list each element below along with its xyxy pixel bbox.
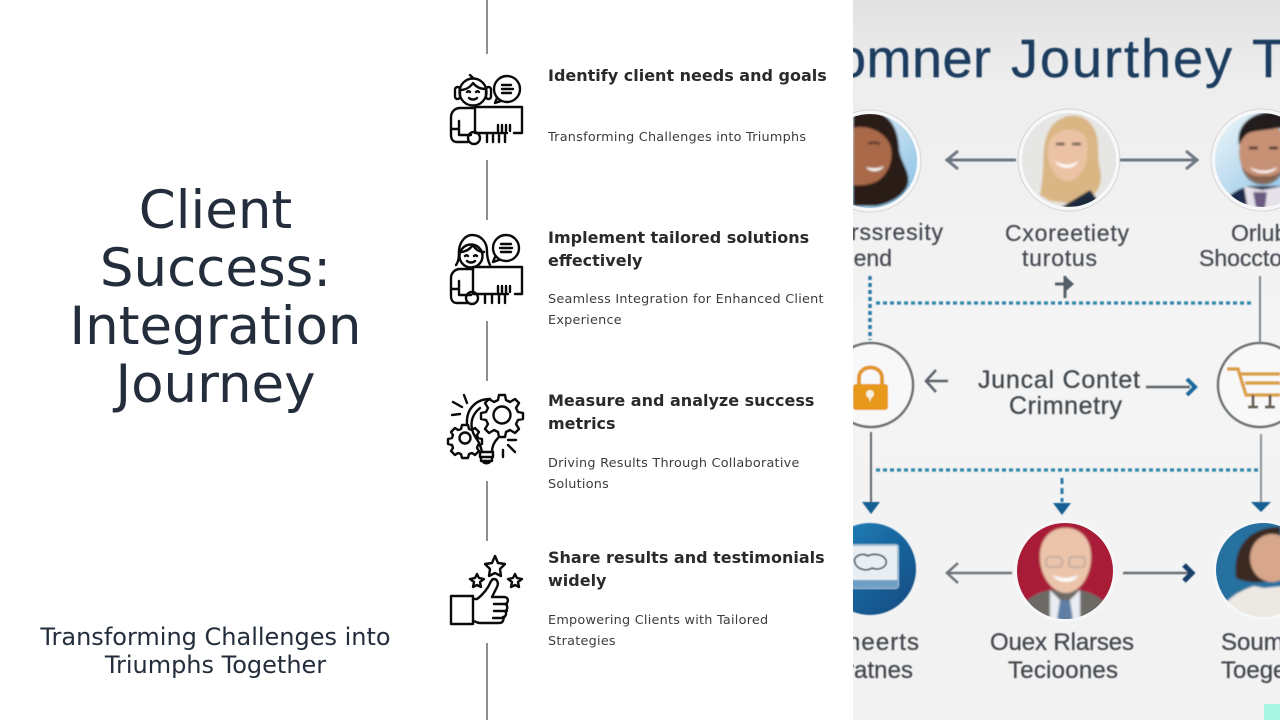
cart circle icon: [1218, 343, 1280, 427]
subtitle: Transforming Challenges into: [40, 623, 391, 651]
heading 2: Implement tailored solutions: [548, 228, 809, 247]
portrait labels: [851, 219, 1280, 271]
heading 3: Measure and analyze success: [548, 391, 814, 410]
icon: thumbs up with stars: [450, 554, 524, 626]
portrait labels: Cxoreetiety: [1005, 220, 1130, 246]
heading 2: effectively: [548, 251, 642, 270]
arrow right from centre label: [1146, 379, 1195, 395]
description 3: [548, 456, 800, 492]
title: Success:: [100, 238, 331, 299]
upper dotted connector: [870, 276, 1260, 342]
heading 3: metrics: [548, 414, 616, 433]
title: Client: [139, 180, 292, 241]
heading 1: Identify client needs and goals: [548, 66, 827, 85]
description 2: Experience: [548, 312, 622, 328]
bottom labels: Ouex Rlarses: [990, 629, 1134, 656]
portrait: brunette woman: [1216, 523, 1280, 617]
description 2: Seamless Integration for Enhanced Client: [548, 292, 824, 306]
centre label: Crimnetry: [1009, 392, 1122, 420]
heading 4: [548, 548, 825, 590]
icon: support agent woman with laptop: [450, 234, 524, 306]
title: [69, 180, 362, 415]
portrait: man in suit: [1211, 109, 1280, 211]
arrows between portraits: [946, 151, 1197, 169]
description 4: Strategies: [548, 634, 616, 648]
image title: Jourthey: [1011, 29, 1232, 89]
mint corner marker: [1264, 704, 1280, 720]
heading 4: Share results and testimonials: [548, 548, 825, 567]
description 4: Empowering Clients with Tailored: [548, 612, 768, 628]
arrows beside bald man: [947, 563, 1192, 583]
description 3: Solutions: [548, 476, 609, 492]
bottom labels: Tecioones: [1008, 657, 1118, 684]
small up arrow: [1055, 276, 1074, 298]
heading 4: widely: [548, 571, 606, 590]
description 4: [548, 612, 768, 648]
heading 3: [548, 391, 814, 433]
portrait labels: rssresity: [853, 219, 944, 245]
lock circle icon: [829, 343, 913, 427]
title: Journey: [115, 354, 316, 415]
portrait: blonde woman: [1018, 109, 1120, 211]
portrait: bald man on red: [1017, 523, 1113, 619]
arrow left from centre label: [926, 370, 948, 392]
subtitle: Triumphs Together: [105, 651, 326, 679]
image title: [836, 29, 1280, 89]
lower connectors with arrows: [862, 432, 1271, 515]
heading 2: [548, 228, 809, 270]
cloud device circle icon: [824, 523, 916, 615]
centre label: [978, 366, 1140, 420]
timeline connector segments: [486, 0, 488, 720]
bottom labels: [846, 629, 1280, 684]
title: Integration: [69, 296, 362, 357]
centre label: Juncal Contet: [978, 366, 1140, 394]
icon: lightbulb with gears: [446, 394, 524, 464]
description 3: Driving Results Through Collaborative: [548, 456, 800, 470]
portrait labels: end: [854, 245, 892, 271]
portrait: curly-haired woman: [853, 110, 922, 212]
panel: customer journey image: [853, 0, 1280, 720]
icon: support agent with headset and laptop: [450, 74, 524, 146]
description 2: [548, 292, 824, 328]
description 1: Transforming Challenges into Triumphs: [548, 130, 806, 144]
subtitle: [40, 623, 391, 679]
portrait labels: turotus: [1022, 245, 1097, 271]
